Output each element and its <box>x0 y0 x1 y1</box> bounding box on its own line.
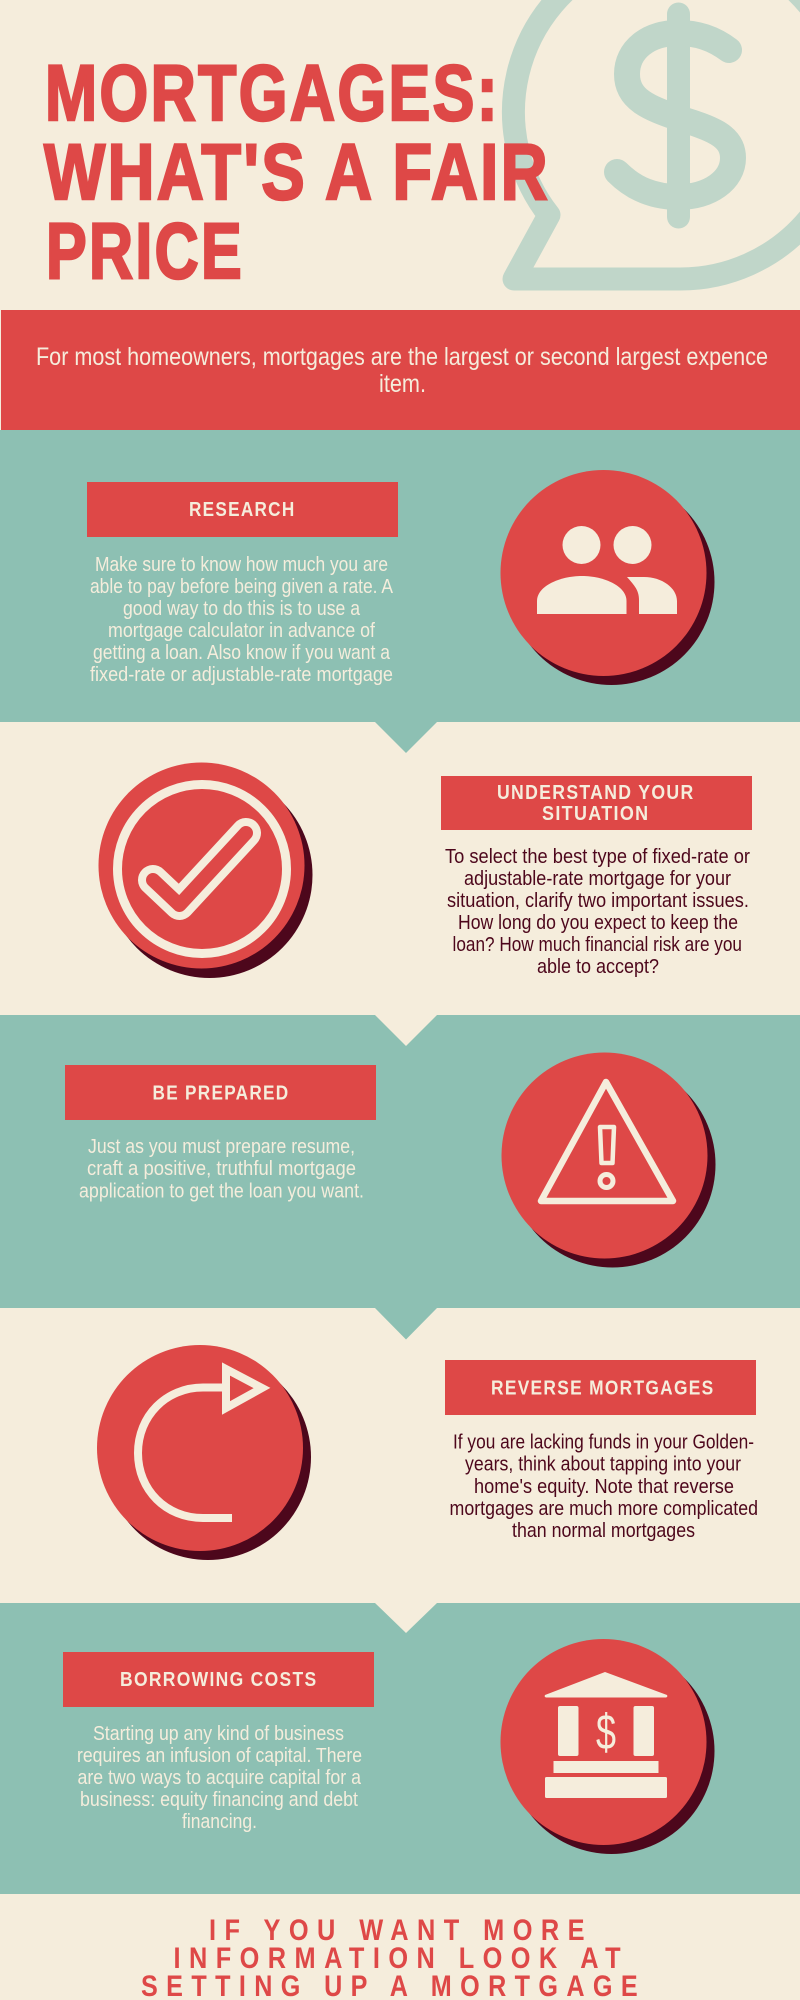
icon: check mark in ring <box>98 762 312 978</box>
footer call to action: INFORMATION LOOK AT <box>174 1942 629 1975</box>
text: research body: getting a loan. Also know if you want a <box>93 641 390 664</box>
icon: speech bubble with dollar sign <box>513 0 800 279</box>
panel: reverse mortgages <box>0 1308 800 1603</box>
text: understand body: How long do you expect to keep the <box>458 911 738 934</box>
text: research body: mortgage calculator in advance of <box>108 619 375 642</box>
text: research body: Make sure to know how much you are <box>95 553 388 576</box>
heading: be prepared: BE PREPARED <box>152 1082 290 1104</box>
text: borrowing costs body: financing. <box>182 1810 257 1833</box>
text: research body: able to pay before being given a rate. A <box>90 575 393 598</box>
text: reverse mortgages body: years, think about tapping into your <box>465 1453 741 1476</box>
heading: reverse mortgages <box>445 1360 756 1415</box>
text: be prepared body <box>79 1135 364 1202</box>
intro text: item. <box>379 370 426 398</box>
panel: footer <box>0 1894 800 2000</box>
panel: borrowing costs <box>0 1603 800 1894</box>
text: borrowing costs body: requires an infusion of capital. There <box>77 1744 362 1767</box>
text: be prepared body: application to get the loan you want. <box>79 1180 364 1202</box>
title: MORTGAGES: <box>45 48 500 137</box>
icon: bank: $ <box>596 1704 616 1760</box>
arrow: teal pointer <box>375 1308 437 1340</box>
text: understand body: loan? How much financial risk are you <box>452 933 742 956</box>
panel: research <box>0 430 800 722</box>
intro text <box>36 343 768 398</box>
text: reverse mortgages body <box>450 1430 758 1542</box>
heading: understand your situation: UNDERSTAND YOUR <box>497 782 694 804</box>
text: reverse mortgages body: If you are lacking funds in your Golden- <box>453 1430 754 1454</box>
text: be prepared body: Just as you must prepare resume, <box>88 1135 355 1158</box>
arrow: teal pointer <box>375 722 437 753</box>
icon: warning triangle <box>502 1052 716 1268</box>
title: WHAT'S A FAIR <box>44 127 550 216</box>
text: understand body: To select the best type of fixed-rate or <box>445 845 750 868</box>
footer call to action: IF YOU WANT MORE <box>209 1914 593 1947</box>
panel: understand your situation <box>0 722 800 1015</box>
text: reverse mortgages body: mortgages are much more complicated <box>450 1497 758 1520</box>
heading: reverse mortgages: REVERSE MORTGAGES <box>491 1378 714 1400</box>
text: understand body: able to accept? <box>537 955 659 978</box>
text: research body <box>90 553 393 686</box>
title <box>44 48 550 295</box>
heading: be prepared <box>65 1065 376 1120</box>
text: understand body <box>445 845 750 978</box>
panel: header <box>0 0 800 310</box>
text: borrowing costs body <box>77 1722 362 1833</box>
text: borrowing costs body: business: equity financing and debt <box>80 1788 358 1811</box>
heading: research: RESEARCH <box>189 499 296 521</box>
text: research body: good way to do this is to use a <box>123 597 361 620</box>
text: borrowing costs body: are two ways to acquire capital for a <box>78 1766 362 1789</box>
icon: people <box>500 470 714 685</box>
text: understand body: situation, clarify two important issues. <box>447 889 749 912</box>
panel: intro band <box>1 310 800 430</box>
text: be prepared body: craft a positive, truthful mortgage <box>87 1157 356 1180</box>
title: PRICE <box>46 206 244 295</box>
icon: curved arrow <box>97 1345 311 1560</box>
text: understand body: adjustable-rate mortgage for your <box>464 867 731 890</box>
text: borrowing costs body: Starting up any kind of business <box>93 1722 344 1745</box>
arrow: cream pointer <box>375 1015 437 1046</box>
icon: bank <box>500 1639 714 1854</box>
text: reverse mortgages body: home's equity. Note that reverse <box>474 1475 734 1498</box>
panel: be prepared <box>0 1015 800 1308</box>
footer call to action <box>141 1914 646 2000</box>
arrow: cream pointer <box>375 1603 437 1633</box>
text: research body: fixed-rate or adjustable-rate mortgage <box>90 663 393 686</box>
heading: borrowing costs <box>63 1652 374 1707</box>
heading: understand your situation <box>441 776 752 830</box>
heading: research <box>87 482 398 537</box>
heading: understand your situation: SITUATION <box>542 803 650 825</box>
text: reverse mortgages body: than normal mortgages <box>512 1519 695 1542</box>
heading: borrowing costs: BORROWING COSTS <box>120 1669 318 1691</box>
